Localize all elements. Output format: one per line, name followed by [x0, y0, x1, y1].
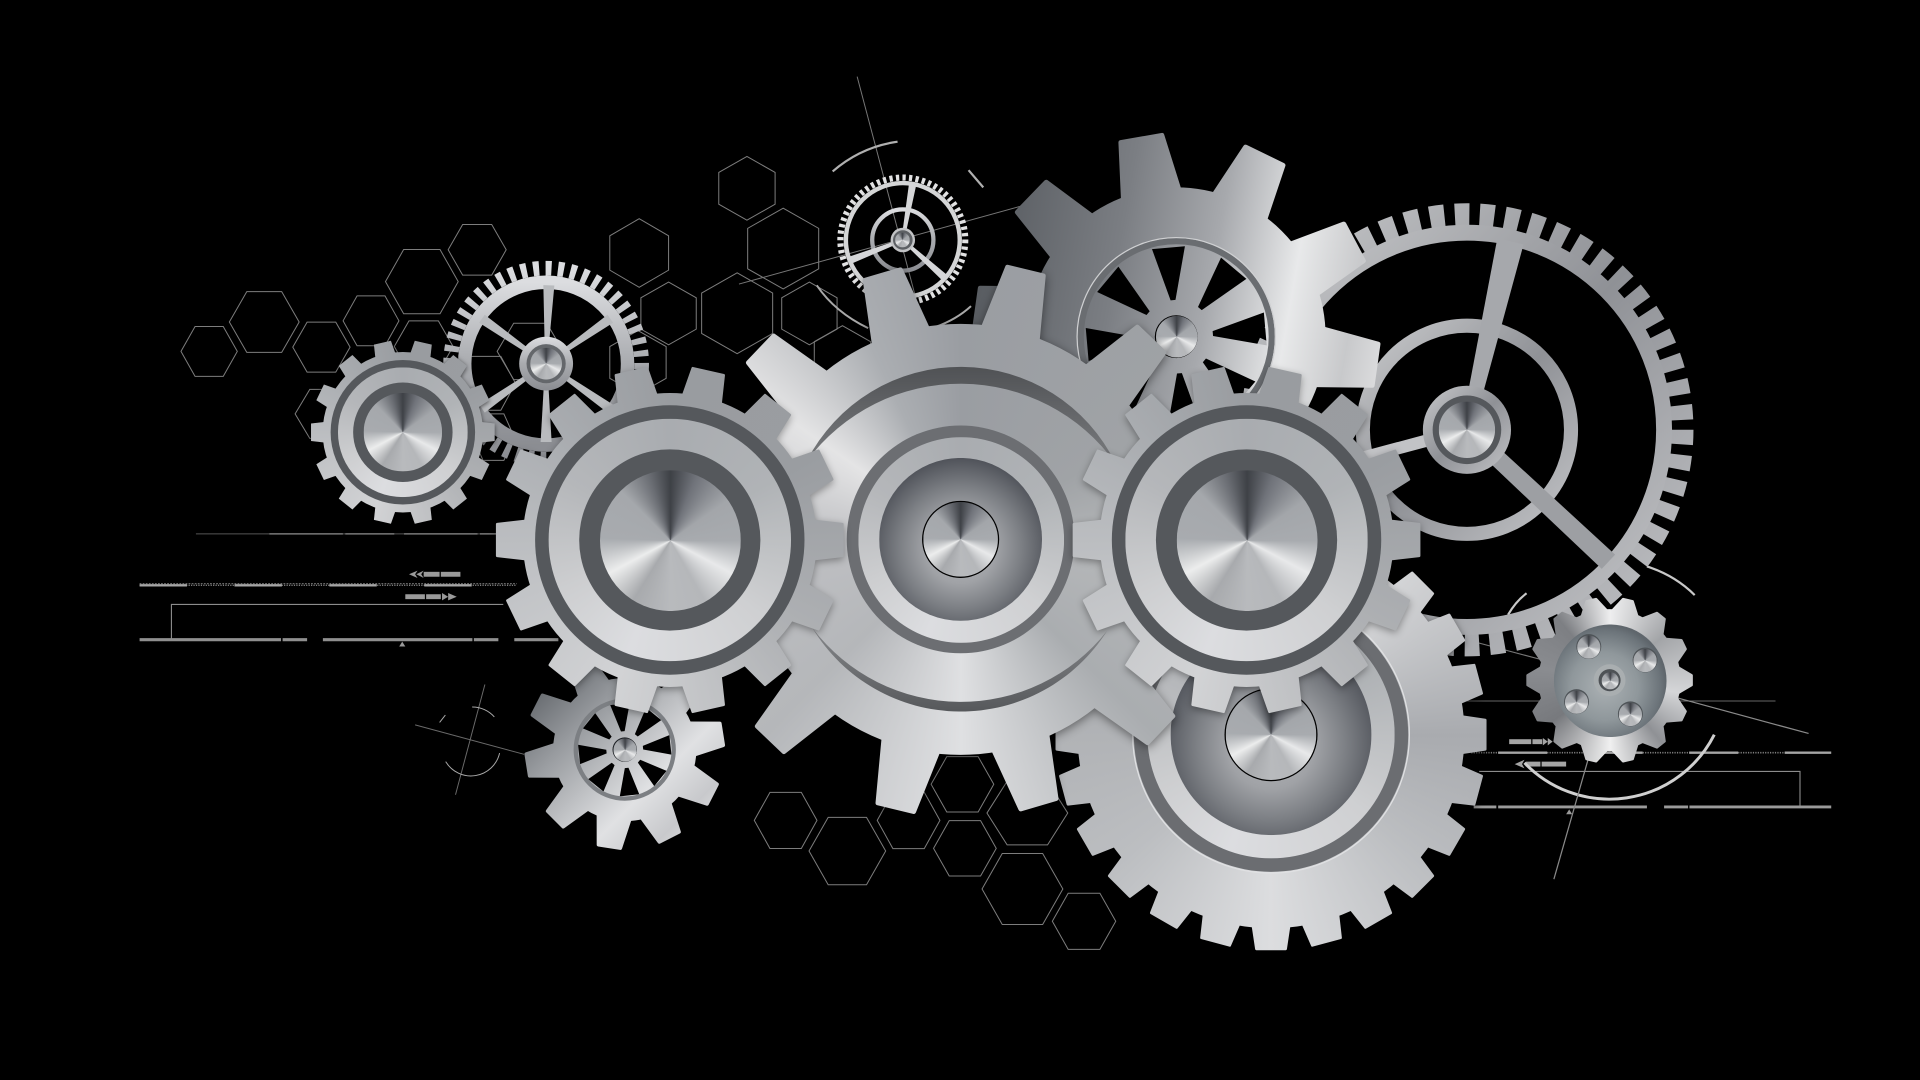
hub	[1423, 386, 1511, 474]
spokes	[1276, 238, 1615, 569]
bowl	[879, 458, 1042, 621]
gear: small riveted gear, right	[1526, 598, 1693, 762]
arrow: right pointing, left panel	[405, 593, 457, 600]
arrow: right pointing, right panel	[1509, 738, 1553, 745]
HUD arcs and lines around top tiny gear	[739, 77, 1022, 328]
gear: tiny fine-toothed wheel, top	[840, 178, 965, 302]
hexagon outlines: upper centre cluster	[610, 156, 871, 394]
inner ring	[1363, 326, 1571, 534]
gear: fine-toothed spoked wheel, upper left	[451, 268, 642, 459]
arrow: left pointing, left panel	[409, 571, 460, 578]
gear: right middle gear	[1069, 362, 1424, 718]
hub cone	[922, 501, 999, 578]
gear: big centre gear	[746, 264, 1178, 814]
arrow: left pointing, right panel	[1515, 760, 1566, 768]
teeth ring	[1251, 214, 1682, 645]
gear: large spoked gear, top	[972, 132, 1380, 412]
tech lines: left	[140, 534, 558, 647]
outer ring	[1270, 233, 1664, 627]
gear: bottom right large gear	[1056, 572, 1490, 950]
crosshair: lower left	[415, 684, 524, 795]
gear: left middle gear	[492, 362, 847, 718]
gear: small toothed disc, upper left	[309, 338, 497, 527]
lower crescent groove	[813, 628, 1107, 712]
tech lines: right	[1463, 701, 1831, 814]
upper crescent groove	[807, 367, 1116, 464]
gear: big fine-toothed wheel, right	[1251, 214, 1682, 645]
hexagon outlines: bottom cluster	[754, 757, 1116, 949]
gear: small spoked gear, lower left	[524, 666, 726, 850]
inner groove	[847, 426, 1074, 653]
rivets	[1564, 634, 1658, 726]
hexagon outlines: upper left cluster	[181, 224, 563, 460]
HUD arcs and lines around right small gear	[1474, 566, 1809, 879]
